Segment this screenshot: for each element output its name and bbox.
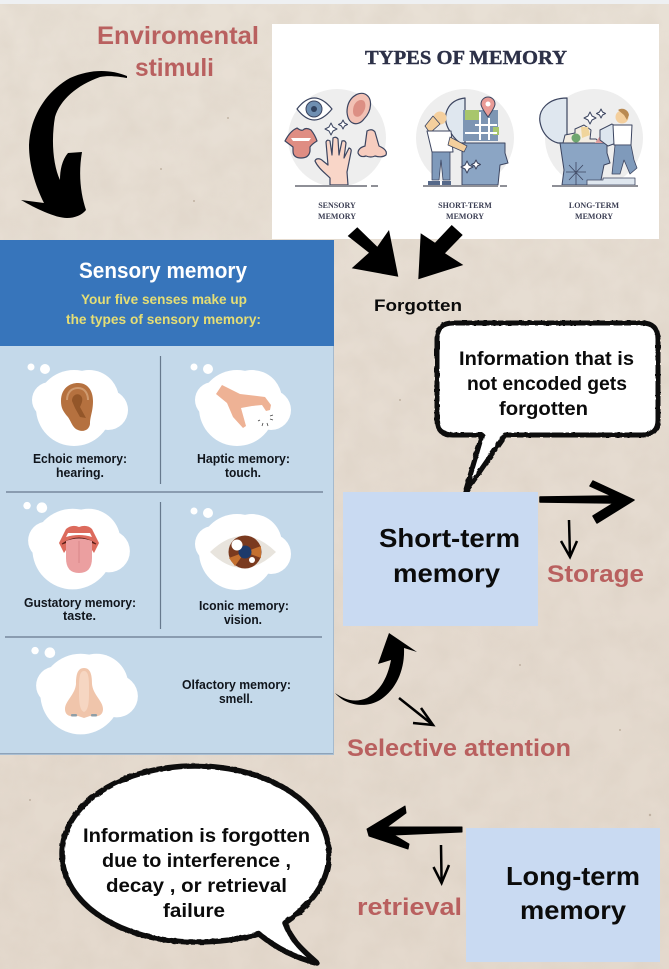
- captions: memory types: MEMORY: [446, 212, 484, 221]
- captions: memory types: SENSORY: [318, 201, 356, 210]
- icon: hand: [216, 385, 273, 428]
- subheading: the types of sensory memory:: [66, 311, 261, 327]
- caption: [197, 451, 290, 480]
- caption: vision.: [224, 612, 262, 627]
- arrow: sensory to forgotten: [348, 227, 398, 277]
- panel: sensory memory: [0, 240, 334, 755]
- captions: memory types: [318, 201, 620, 221]
- cell: iconic memory: [190, 508, 291, 627]
- arrow: small to selective attention: [399, 698, 433, 725]
- illustration: short-term memory: [416, 89, 514, 187]
- callout: not encoded: not encoded gets: [467, 373, 627, 395]
- cell: gustatory memory: [23, 502, 136, 623]
- illustration: long-term memory: [540, 89, 643, 187]
- cell: haptic memory: [190, 364, 291, 480]
- arrow: stimuli curving down to sensory memory: [21, 71, 127, 218]
- arrow: small down to storage: [561, 520, 577, 557]
- arrow: small down to retrieval: [434, 845, 449, 883]
- box: long-term memory: Long-term: [506, 861, 640, 891]
- subheading: Your five senses make up: [81, 291, 247, 307]
- caption: touch.: [225, 465, 261, 480]
- captions: memory types: SHORT-TERM: [438, 201, 492, 210]
- callout: why forgotten: due to interference ,: [102, 851, 291, 872]
- caption: Iconic memory:: [199, 598, 289, 613]
- box: short-term memory: [343, 492, 538, 626]
- arrow: short-term to storage: [540, 481, 634, 523]
- box: short-term memory: memory: [393, 558, 501, 588]
- subheading: [66, 291, 261, 327]
- icon: nose: [65, 668, 103, 718]
- label: Enviromental stimuli: Enviromental: [97, 22, 259, 50]
- callout: not encoded: Information that is: [459, 348, 634, 370]
- box: short-term memory: Short-term: [379, 523, 520, 553]
- heading: types of memory: TYPES OF MEMORY: [365, 47, 568, 69]
- arrow: sensory to short-term: [335, 633, 417, 705]
- panel: types of memory: [272, 24, 659, 239]
- arrow: short-term to forgotten: [418, 225, 463, 279]
- icon: eye: [210, 536, 276, 568]
- callout: why forgotten: failure: [163, 901, 225, 922]
- illustration: sensory memory: [285, 89, 386, 187]
- cell: olfactory memory: [31, 647, 291, 734]
- caption: [24, 595, 136, 623]
- callout: not encoded: [437, 323, 658, 493]
- caption: [182, 677, 291, 706]
- callout: not encoded: forgotten: [499, 398, 588, 420]
- cell: echoic memory: [28, 364, 128, 480]
- label: retrieval: retrieval: [357, 894, 462, 921]
- caption: Olfactory memory:: [182, 677, 291, 692]
- label: storage: Storage: [547, 561, 644, 588]
- arrow: long-term to retrieval: [367, 806, 462, 849]
- caption: [33, 451, 127, 480]
- callout: why forgotten: [62, 766, 329, 963]
- caption: Echoic memory:: [33, 451, 127, 466]
- caption: taste.: [63, 608, 96, 623]
- caption: Haptic memory:: [197, 451, 290, 466]
- callout: why forgotten: Information is forgotten: [83, 826, 310, 847]
- caption: smell.: [219, 691, 253, 706]
- label: Enviromental stimuli: stimuli: [135, 54, 214, 82]
- caption: hearing.: [56, 465, 104, 480]
- icon: mouth and tongue: [59, 526, 99, 573]
- heading: sensory memory: Sensory memory: [79, 258, 248, 283]
- label: Enviromental stimuli: [97, 22, 259, 82]
- captions: memory types: LONG-TERM: [569, 201, 620, 210]
- caption: Gustatory memory:: [24, 595, 136, 610]
- caption: [199, 598, 289, 627]
- box: long-term memory: memory: [520, 895, 627, 925]
- icon: ear: [61, 383, 93, 431]
- label: selective attention: Selective attention: [347, 735, 571, 762]
- callout: why forgotten: decay , or retrieval: [106, 876, 287, 897]
- label: forgotten: Forgotten: [374, 296, 462, 315]
- captions: memory types: MEMORY: [318, 212, 356, 221]
- box: long-term memory: [466, 828, 660, 962]
- captions: memory types: MEMORY: [575, 212, 613, 221]
